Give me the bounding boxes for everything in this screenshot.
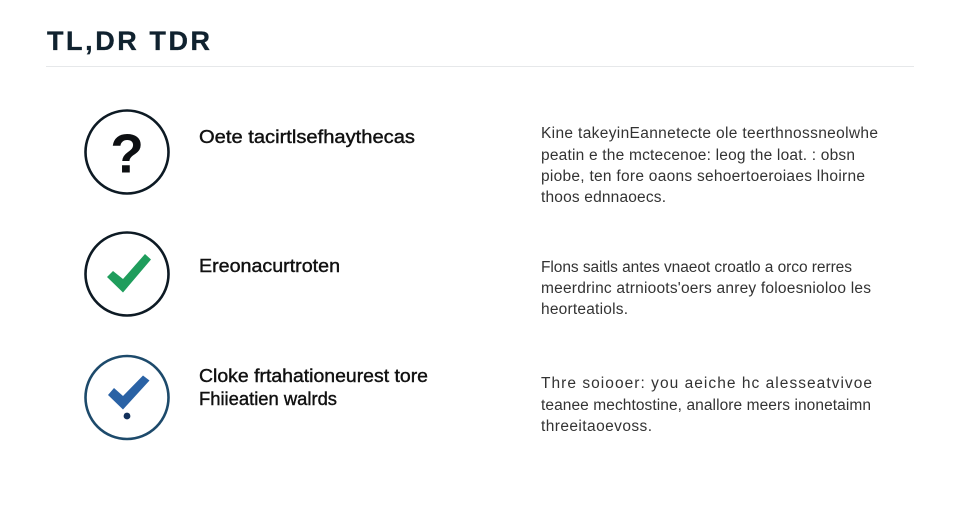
icon: question mark [86, 110, 168, 194]
row 3 [86, 356, 872, 439]
row 1 [86, 110, 878, 206]
text block: row 3 [541, 375, 872, 435]
icon: question mark: ? [110, 122, 144, 184]
text block: row 2: Flons saitls antes vnaeot croatlo a orco rerres [541, 259, 852, 276]
text block: row 2: heorteatiols. [541, 301, 628, 318]
text block: row 1: thoos ednnaoecs. [541, 189, 666, 206]
text block: row 1: piobe, ten fore oaons sehoertoeroiaes lhoirne [541, 168, 865, 185]
heading: row 2: Ereonacurtroten [199, 256, 340, 276]
text block: row 1 [541, 125, 878, 206]
text block: row 2 [541, 259, 871, 318]
text block: row 1: Kine takeyinEannetecte ole teerthnossneolwhe [541, 125, 878, 142]
heading: row 3: Fhiieatien walrds [199, 389, 337, 409]
text block: row 2: meerdrinc atrnioots'oers anrey foloesnioloo les [541, 280, 871, 297]
heading: row 1: Oete tacirtlsefhaythecas [199, 127, 415, 147]
text block: row 1: peatin e the mctecenoe: leog the loat. : obsn [541, 147, 855, 164]
text block: row 3: Thre soiooer: you aeiche hc alesseatvivoe [541, 375, 872, 392]
text block: row 3: teanee mechtostine, anallore meers inonetaimn [541, 397, 871, 414]
title: TL,DR TDR [47, 26, 210, 56]
text block: row 3: threeitaoevoss. [541, 418, 652, 435]
row 2 [86, 232, 871, 318]
heading: row 3: Cloke frtahationeurest tore [199, 366, 428, 386]
icon: green check [86, 232, 168, 316]
icon: blue check with dot [86, 356, 168, 439]
heading: row 3 [199, 366, 428, 409]
